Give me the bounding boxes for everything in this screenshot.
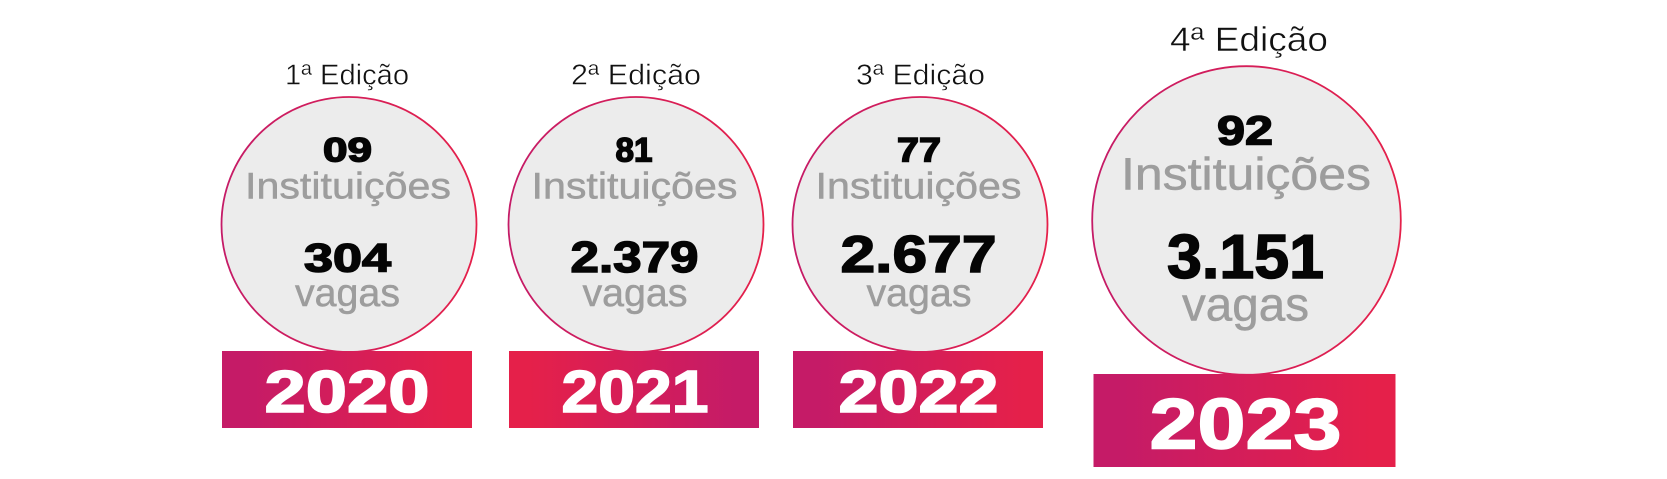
number: 2.677 vagas: 2.677 bbox=[840, 226, 996, 284]
label: vagas: vagas bbox=[1182, 278, 1309, 330]
panel: 2021 edition bbox=[508, 60, 764, 428]
year bar: 2021 bbox=[509, 351, 759, 428]
year bar: 2023 bbox=[1094, 374, 1396, 467]
circle: 2023 bbox=[1092, 66, 1401, 375]
heading: 3ª Edição: 3ª Edição bbox=[856, 60, 985, 92]
label: Instituições: Instituições bbox=[532, 166, 738, 206]
label: vagas: vagas bbox=[582, 272, 688, 315]
circle: 2020 bbox=[222, 97, 476, 352]
panel: 2020 edition bbox=[222, 60, 476, 428]
heading: 4ª Edição: 4ª Edição bbox=[1170, 21, 1328, 59]
number: 3.151 vagas: 3.151 bbox=[1167, 223, 1324, 292]
year: 2022: 2022 bbox=[838, 359, 998, 425]
number: 2.379 vagas: 2.379 bbox=[570, 233, 698, 282]
heading: 1ª Edição: 1ª Edição bbox=[285, 60, 409, 92]
panel: 2022 edition bbox=[792, 60, 1048, 428]
circle: 2021 bbox=[508, 97, 764, 352]
year bar: 2020 bbox=[222, 351, 472, 428]
panel: 2023 edition bbox=[1092, 21, 1401, 467]
label: Instituições: Instituições bbox=[1121, 148, 1371, 200]
year: 2021: 2021 bbox=[562, 359, 708, 425]
number: 77 institutions: 77 bbox=[897, 132, 941, 170]
year bar: 2022 bbox=[793, 351, 1043, 428]
label: Instituições: Instituições bbox=[816, 166, 1022, 206]
number: 09 institutions: 09 bbox=[323, 132, 372, 170]
label: vagas: vagas bbox=[866, 272, 972, 315]
number: 92 institutions: 92 bbox=[1217, 108, 1273, 154]
number: 81 institutions: 81 bbox=[616, 132, 652, 170]
label: vagas: vagas bbox=[295, 272, 400, 315]
label: Instituições: Instituições bbox=[245, 166, 451, 206]
circle: 2022 bbox=[792, 97, 1048, 352]
year: 2020: 2020 bbox=[264, 359, 430, 425]
number: 304 vagas: 304 bbox=[304, 236, 392, 280]
heading: 2ª Edição: 2ª Edição bbox=[571, 60, 701, 92]
year: 2023: 2023 bbox=[1150, 386, 1342, 464]
